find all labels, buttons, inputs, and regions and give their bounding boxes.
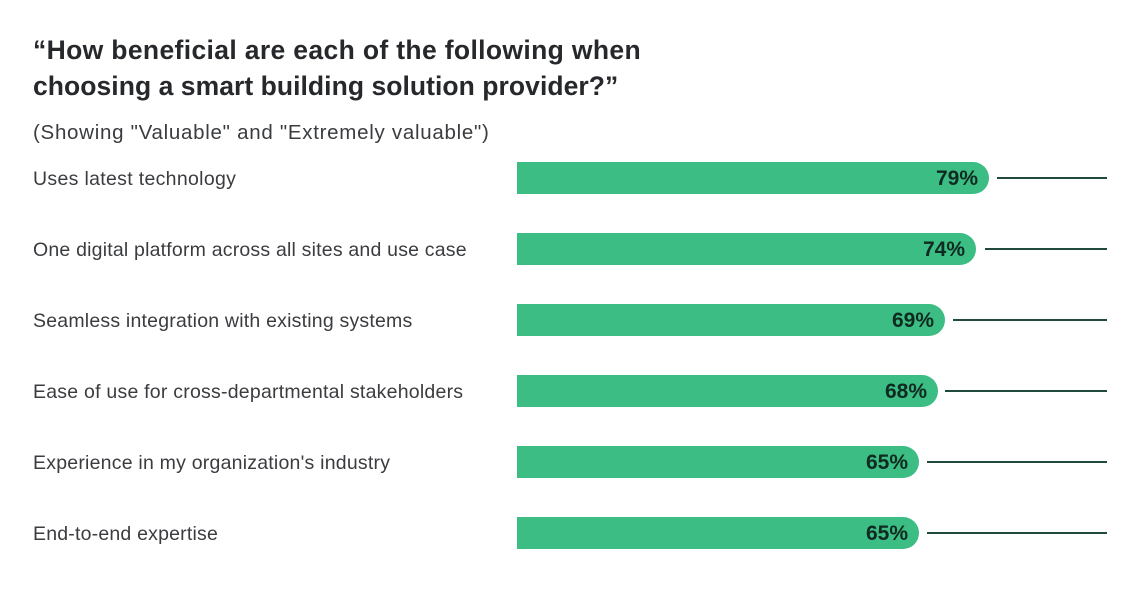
title: “How beneficial are each of the following when [33, 35, 641, 65]
row: industry experience: 65% [866, 451, 908, 474]
row: uses latest technology [33, 162, 1107, 194]
row: seamless integration [33, 304, 1107, 336]
row: industry experience: Experience in my organization's industry [33, 452, 390, 474]
row: end-to-end expertise: End-to-end expertise [33, 523, 218, 545]
row: ease of use [33, 375, 1107, 407]
subtitle: (Showing "Valuable" and "Extremely valuable") [33, 121, 490, 144]
row: end-to-end expertise: 65% [866, 522, 908, 545]
row: industry experience [33, 446, 1107, 478]
row: seamless integration: Seamless integration with existing systems [33, 310, 412, 332]
row: end-to-end expertise [33, 517, 1107, 549]
row: ease of use: 68% [885, 380, 927, 403]
row: one digital platform [33, 233, 1107, 265]
title [33, 35, 641, 101]
row: seamless integration: 69% [892, 309, 934, 332]
row: uses latest technology: 79% [936, 167, 978, 190]
row: one digital platform: One digital platform across all sites and use case [33, 239, 467, 261]
row: uses latest technology: Uses latest technology [33, 168, 236, 190]
row: ease of use: Ease of use for cross-departmental stakeholders [33, 381, 463, 403]
title: choosing a smart building solution provider?” [33, 71, 618, 101]
row: one digital platform: 74% [923, 238, 965, 261]
